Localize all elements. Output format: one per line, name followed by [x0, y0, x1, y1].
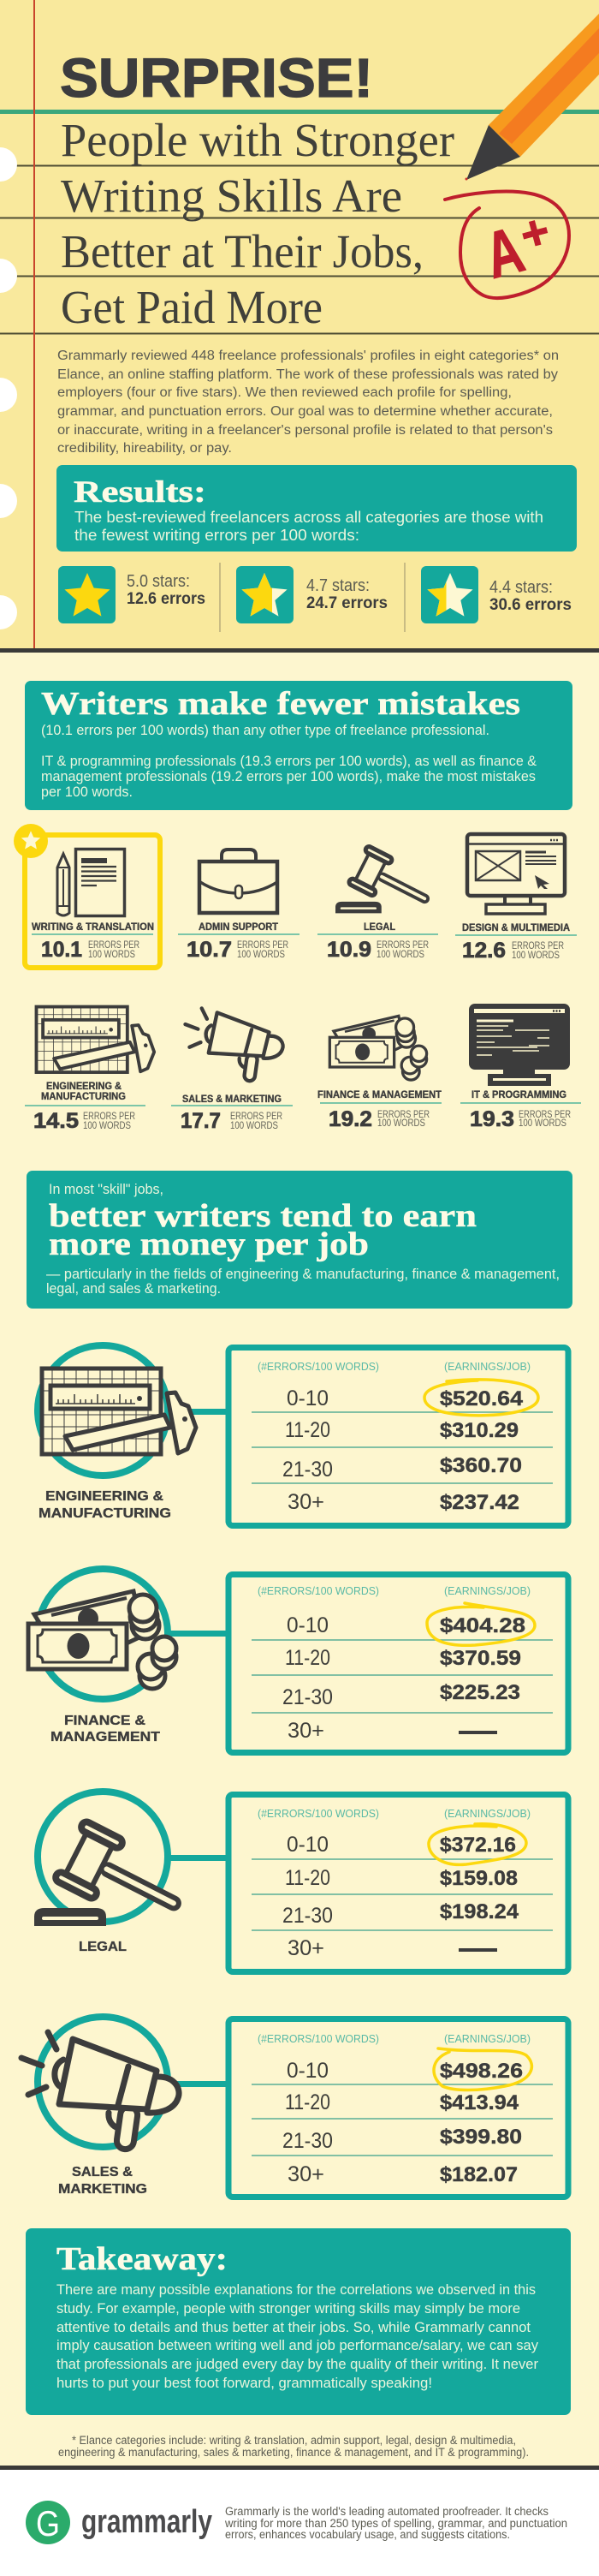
- description: better writers: [46, 1267, 560, 1297]
- intro paragraph: credibility, hireability, or pay.: [57, 441, 232, 456]
- table: earnings per job: (EARNINGS/JOB): [444, 1807, 531, 1820]
- table: earnings per job: 21-30: [282, 2129, 333, 2153]
- table: earnings per job: 0-10: [287, 1613, 329, 1637]
- footer description: errors, enhances vocabulary usage, and suggests citations.: [225, 2528, 510, 2541]
- label: MARKETING: [58, 2182, 147, 2197]
- table: earnings per job: 21-30: [282, 1685, 333, 1709]
- heading: better writers: better writers tend to earn: [49, 1198, 477, 1234]
- category: writing & translation: WRITING & TRANSLATION: [32, 922, 154, 933]
- category: legal: 100 WORDS: [377, 948, 424, 960]
- connector and circle: [38, 1345, 226, 1476]
- category: design & multimedia: DESIGN & MULTIMEDIA: [462, 923, 570, 933]
- category: it & programming: 100 WORDS: [519, 1117, 566, 1129]
- table: earnings per job: 30+: [288, 1719, 324, 1743]
- subtitle: People with Stronger: [61, 114, 454, 166]
- intro paragraph: Grammarly reviewed 448 freelance professionals' profiles in eight categories* on: [57, 349, 559, 363]
- category: engineering & manufacturing: 14.5: [33, 1109, 79, 1133]
- results description: The best-reviewed freelancers across all categories are those with: [74, 509, 543, 526]
- description: writers: IT & programming professionals (19.3 errors per 100 words), as well as finance &: [41, 754, 537, 769]
- table: earnings per job: (#ERRORS/100 WORDS): [258, 1360, 379, 1373]
- footnote: * Elance categories include: writing & translation, admin support, legal, design & multimedia,: [72, 2434, 516, 2447]
- category: it & programming: ERRORS PER: [519, 1108, 571, 1120]
- takeaway text: hurts to put your best foot forward, grammatically speaking!: [56, 2376, 432, 2391]
- table: earnings per job: [228, 2019, 568, 2197]
- category: design & multimedia: 12.6: [462, 939, 506, 963]
- icon: code monitor: [469, 1004, 570, 1086]
- highlight: top earnings: [434, 2048, 531, 2090]
- category: it & programming: IT & PROGRAMMING: [471, 1090, 566, 1100]
- heading: better writers: more money per job: [49, 1226, 369, 1262]
- category: writing & translation: [32, 850, 154, 962]
- label: SALES &: [72, 2165, 133, 2179]
- heading: takeaway: Takeaway:: [56, 2241, 228, 2277]
- intro paragraph: [57, 349, 559, 456]
- icon: circled A+ grade: [445, 192, 569, 298]
- connector and circle: [38, 1569, 226, 1699]
- category: finance & management: 19.2: [329, 1107, 372, 1131]
- label: [50, 1714, 160, 1744]
- table: earnings per job: $237.42: [440, 1491, 519, 1514]
- category: admin support: 100 WORDS: [237, 948, 285, 960]
- takeaway text: attentive to details and thus better at their jobs. So, while Grammarly cannot: [56, 2320, 531, 2335]
- table: earnings per job: $372.16: [440, 1834, 516, 1857]
- label: MANAGEMENT: [50, 1730, 160, 1744]
- category: writing & translation: ERRORS PER: [88, 939, 139, 951]
- icon: gavel: [335, 843, 440, 921]
- label: LEGAL: [79, 1940, 127, 1954]
- subtitle: [61, 114, 454, 333]
- subtitle: Get Paid More: [61, 281, 323, 333]
- logo: grammarly: [26, 2501, 212, 2544]
- icon: monitor with layout: [467, 834, 565, 914]
- takeaway text: study. For example, people with stronger writing skills may simply be more: [56, 2301, 520, 2317]
- category: admin support: ADMIN SUPPORT: [199, 922, 278, 933]
- text: 5.0 stars: 12.6 errors: [127, 590, 205, 608]
- category: sales & marketing: 17.7: [181, 1109, 221, 1133]
- label: MANUFACTURING: [39, 1506, 171, 1521]
- category: admin support: ERRORS PER: [237, 939, 288, 951]
- icon: briefcase: [199, 850, 277, 913]
- table: earnings per job: 0-10: [287, 1386, 329, 1410]
- connector and circle: [38, 2017, 226, 2147]
- results description: the fewest writing errors per 100 words:: [74, 527, 359, 544]
- footer description: writing for more than 250 types of spelling, grammar, and punctuation: [224, 2517, 567, 2530]
- section: legal earnings: [34, 1792, 568, 1971]
- subtitle: Better at Their Jobs,: [61, 225, 424, 277]
- table: earnings per job: $399.80: [440, 2126, 522, 2149]
- category: admin support: [178, 850, 300, 962]
- table: earnings per job: $310.29: [440, 1419, 519, 1442]
- icon: cash and coins: [329, 1016, 427, 1080]
- category: writing & translation: 100 WORDS: [88, 948, 135, 960]
- table: earnings per job: 11-20: [285, 1866, 330, 1890]
- highlight: top earnings: [429, 1824, 526, 1864]
- takeaway text: imply causation between writing well and job performance/salary, we can say: [56, 2338, 539, 2353]
- table: earnings per job: 11-20: [285, 1418, 330, 1442]
- table: earnings per job: 30+: [288, 1490, 324, 1514]
- section: engineering earnings: [38, 1345, 568, 1526]
- category: legal: ERRORS PER: [377, 939, 429, 951]
- text: 4.7 stars: 4.7 stars:: [306, 576, 370, 595]
- table: earnings per job: 21-30: [282, 1458, 333, 1482]
- category: admin support: 10.7: [187, 938, 232, 962]
- text: 4.4 stars: [489, 578, 572, 614]
- description: writers: (10.1 errors per 100 words) than any other type of freelance professional.: [41, 723, 489, 738]
- panel: better writers earn more: [27, 1171, 572, 1309]
- table: earnings per job: 30+: [288, 1936, 324, 1960]
- table: earnings per job: $159.08: [440, 1867, 518, 1890]
- table: earnings per job: [228, 1574, 568, 1752]
- section: finance earnings: [28, 1569, 568, 1752]
- table: earnings per job: (EARNINGS/JOB): [444, 2032, 531, 2045]
- table: earnings per job: 21-30: [282, 1904, 333, 1928]
- category: it & programming: 19.3: [470, 1107, 514, 1131]
- table: earnings per job: $404.28: [440, 1614, 525, 1637]
- icon: orange pencil: [466, 14, 599, 180]
- description: better writers: — particularly in the fields of engineering & manufacturing, finance & management,: [46, 1267, 560, 1282]
- category: engineering & manufacturing: 100 WORDS: [83, 1119, 131, 1131]
- category: finance & management: FINANCE & MANAGEMENT: [317, 1090, 442, 1100]
- icon: five star rating: [58, 566, 116, 623]
- table: earnings per job: 0-10: [287, 1833, 329, 1857]
- intro paragraph: or inaccurate, writing in a freelancer's personal profile is related to that person's: [57, 423, 553, 438]
- category: finance & management: ERRORS PER: [377, 1108, 430, 1120]
- category: engineering & manufacturing: ENGINEERING &: [46, 1082, 122, 1092]
- highlight: top earnings: [427, 1603, 535, 1645]
- table: earnings per job: (EARNINGS/JOB): [444, 1584, 531, 1597]
- table: earnings per job: $413.94: [440, 2091, 519, 2114]
- panel: writers make fewer mistakes: [25, 681, 572, 810]
- table: earnings per job: $498.26: [440, 2060, 523, 2083]
- highlight: best category frame with star badge: [14, 824, 160, 968]
- category: engineering & manufacturing: MANUFACTURING: [41, 1092, 126, 1102]
- table: earnings per job: $198.24: [440, 1900, 519, 1923]
- category: sales & marketing: ERRORS PER: [230, 1110, 282, 1122]
- intro paragraph: employers (four or five stars). We then reviewed each profile for spelling,: [57, 385, 512, 400]
- takeaway text: [56, 2282, 539, 2391]
- icon: megaphone: [185, 1008, 283, 1082]
- icon: cash and coins: [28, 1591, 176, 1689]
- icon: blueprint and t-square: [42, 1368, 196, 1454]
- footnote: [58, 2434, 529, 2459]
- text: 4.4 stars: 30.6 errors: [489, 596, 572, 614]
- table: earnings per job: (#ERRORS/100 WORDS): [258, 1807, 379, 1820]
- footer description: [224, 2505, 567, 2541]
- label: FINANCE &: [64, 1714, 145, 1728]
- category: sales & marketing: 100 WORDS: [230, 1119, 278, 1131]
- page background: lower cream: [0, 651, 599, 2468]
- icon: pencil and document: [57, 850, 125, 916]
- description: writers: [41, 723, 537, 800]
- table: earnings per job: $182.07: [440, 2163, 518, 2186]
- category: legal: LEGAL: [364, 922, 395, 933]
- intro line: In most "skill" jobs,: [49, 1181, 163, 1197]
- icon: megaphone: [21, 2032, 179, 2150]
- intro paragraph: Elance, an online staffing platform. The work of these professionals was rated by: [57, 367, 558, 382]
- heading: results: Results:: [74, 474, 206, 509]
- table: earnings per job: 11-20: [285, 2090, 330, 2114]
- icon: circled A+ grade: A: [477, 213, 531, 293]
- category: engineering & manufacturing: [25, 1007, 154, 1133]
- table: earnings per job: 30+: [288, 2162, 324, 2186]
- highlight: top earnings: [424, 1380, 538, 1416]
- text: 5.0 stars: 5.0 stars:: [127, 572, 190, 591]
- table: earnings per job: [228, 1348, 568, 1526]
- category: finance & management: 100 WORDS: [377, 1117, 425, 1129]
- panel: results: [56, 465, 577, 552]
- category: writing & translation: 10.1: [41, 938, 82, 962]
- logo: grammarly: G: [36, 2503, 60, 2543]
- icon: 4.7 star rating: [236, 566, 294, 623]
- category: design & multimedia: 100 WORDS: [512, 949, 560, 961]
- table: earnings per job: (EARNINGS/JOB): [444, 1360, 531, 1373]
- table: earnings per job: (#ERRORS/100 WORDS): [258, 2032, 379, 2045]
- section: sales earnings: [21, 2017, 568, 2197]
- category: legal: [317, 843, 440, 962]
- category: it & programming: [460, 1004, 581, 1131]
- title: SURPRISE!: [60, 47, 373, 109]
- icon: 4.4 star rating: [421, 566, 478, 623]
- takeaway text: that professionals are judged every day by the quality of their writing. It never: [56, 2357, 539, 2372]
- description: better writers: legal, and sales & marketing.: [46, 1281, 221, 1297]
- category: engineering & manufacturing: ERRORS PER: [83, 1110, 135, 1122]
- heading: better writers: [49, 1198, 477, 1262]
- category: sales & marketing: SALES & MARKETING: [182, 1094, 282, 1105]
- table: earnings per job: 11-20: [285, 1646, 330, 1670]
- description: writers: management professionals (19.2 errors per 100 words), make the most mistakes: [41, 769, 536, 784]
- page background: footer white: [0, 2468, 599, 2576]
- icon: blueprint and t-square: [36, 1007, 154, 1072]
- panel: takeaway: [26, 2228, 571, 2415]
- text: 4.7 stars: [306, 576, 388, 612]
- intro paragraph: grammar, and punctuation errors. Our goal was to determine whether accurate,: [57, 404, 553, 419]
- category: legal: 10.9: [327, 938, 371, 962]
- footnote: engineering & manufacturing, sales & marketing, finance & management, and IT & programming).: [58, 2446, 529, 2459]
- table: earnings per job: 0-10: [287, 2059, 329, 2083]
- table: earnings per job: (#ERRORS/100 WORDS): [258, 1584, 379, 1597]
- subtitle: Writing Skills Are: [61, 170, 402, 222]
- table: earnings per job: $360.70: [440, 1454, 522, 1477]
- table: earnings per job: $370.59: [440, 1647, 521, 1670]
- text: 5.0 stars: [127, 572, 205, 608]
- category: finance & management: [317, 1016, 442, 1131]
- table: earnings per job: $225.23: [440, 1681, 520, 1704]
- heading: writers: Writers make fewer mistakes: [41, 686, 520, 722]
- footer description: Grammarly is the world's leading automated proofreader. It checks: [225, 2505, 549, 2518]
- table: earnings per job: $520.64: [440, 1387, 524, 1410]
- table: earnings per job: [228, 1795, 568, 1971]
- results description: [74, 509, 543, 544]
- takeaway text: There are many possible explanations for the correlations we observed in this: [56, 2282, 536, 2298]
- logo: grammarly: grammarly: [81, 2504, 212, 2540]
- description: writers: per 100 words.: [41, 784, 133, 800]
- icon: circled A+ grade: +: [514, 203, 555, 262]
- panel: notebook paper header: [0, 0, 599, 649]
- text: 4.7 stars: 24.7 errors: [306, 594, 388, 612]
- category: sales & marketing: [171, 1008, 293, 1133]
- label: [58, 2165, 147, 2197]
- category: design & multimedia: ERRORS PER: [512, 939, 564, 951]
- text: 4.4 stars: 4.4 stars:: [489, 578, 553, 597]
- icon: gavel: [34, 1816, 197, 1940]
- category: design & multimedia: [455, 834, 577, 963]
- label: ENGINEERING &: [45, 1489, 163, 1504]
- connector and circle: [38, 1792, 226, 1922]
- label: [39, 1489, 171, 1521]
